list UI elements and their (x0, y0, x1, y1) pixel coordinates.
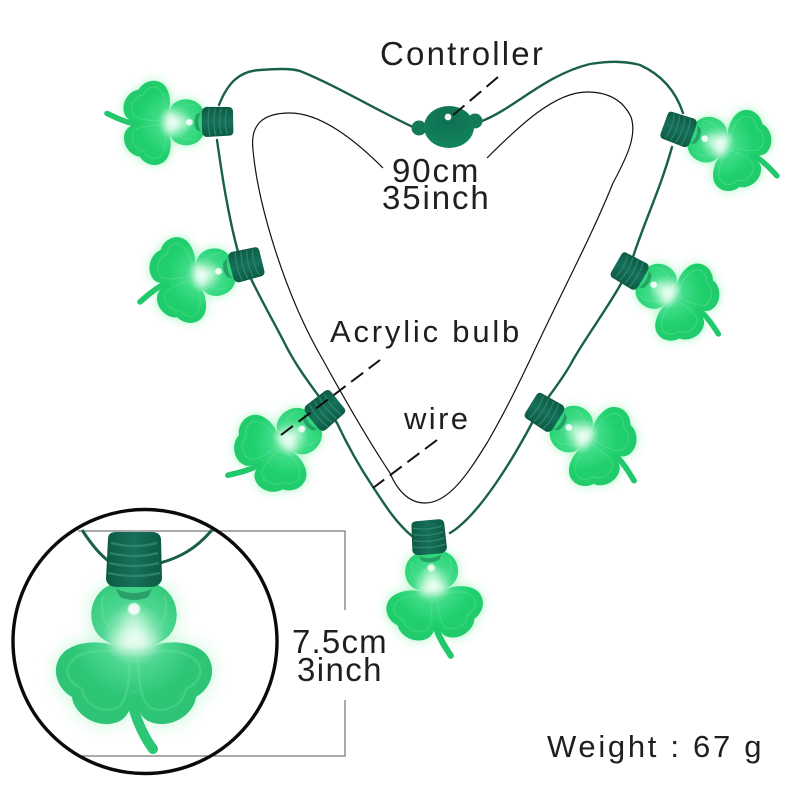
bulb: middle left (127, 218, 272, 334)
controller (412, 106, 482, 148)
label: weight: Weight : 67 g (547, 729, 764, 764)
label: bulb size (292, 623, 388, 688)
label: acrylic bulb: Acrylic bulb (330, 314, 522, 349)
label: length: 90cm (392, 152, 480, 189)
label: length: 35inch (382, 179, 491, 216)
label: bulb size: 3inch (297, 651, 383, 688)
label: bulb size: 7.5cm (292, 623, 388, 660)
label: length (382, 152, 491, 216)
bulb: top left (107, 79, 234, 166)
necklace wire (217, 62, 683, 537)
magnified bulb dimension bracket (78, 531, 345, 756)
bulb: top right (650, 84, 795, 206)
bulb: middle right (595, 227, 745, 362)
magnifier: close-up bulb (13, 510, 277, 774)
bulb: lower left (207, 366, 365, 517)
bulb: lower right (508, 367, 663, 509)
dashed leader: wire (373, 440, 437, 488)
dashed leader: acrylic bulb (281, 360, 380, 435)
label: wire: wire (403, 401, 470, 436)
bulb: bottom centre (379, 516, 487, 661)
dashed leader: controller (452, 77, 498, 116)
label: controller: Controller (380, 35, 545, 72)
length outline curve (253, 92, 633, 503)
